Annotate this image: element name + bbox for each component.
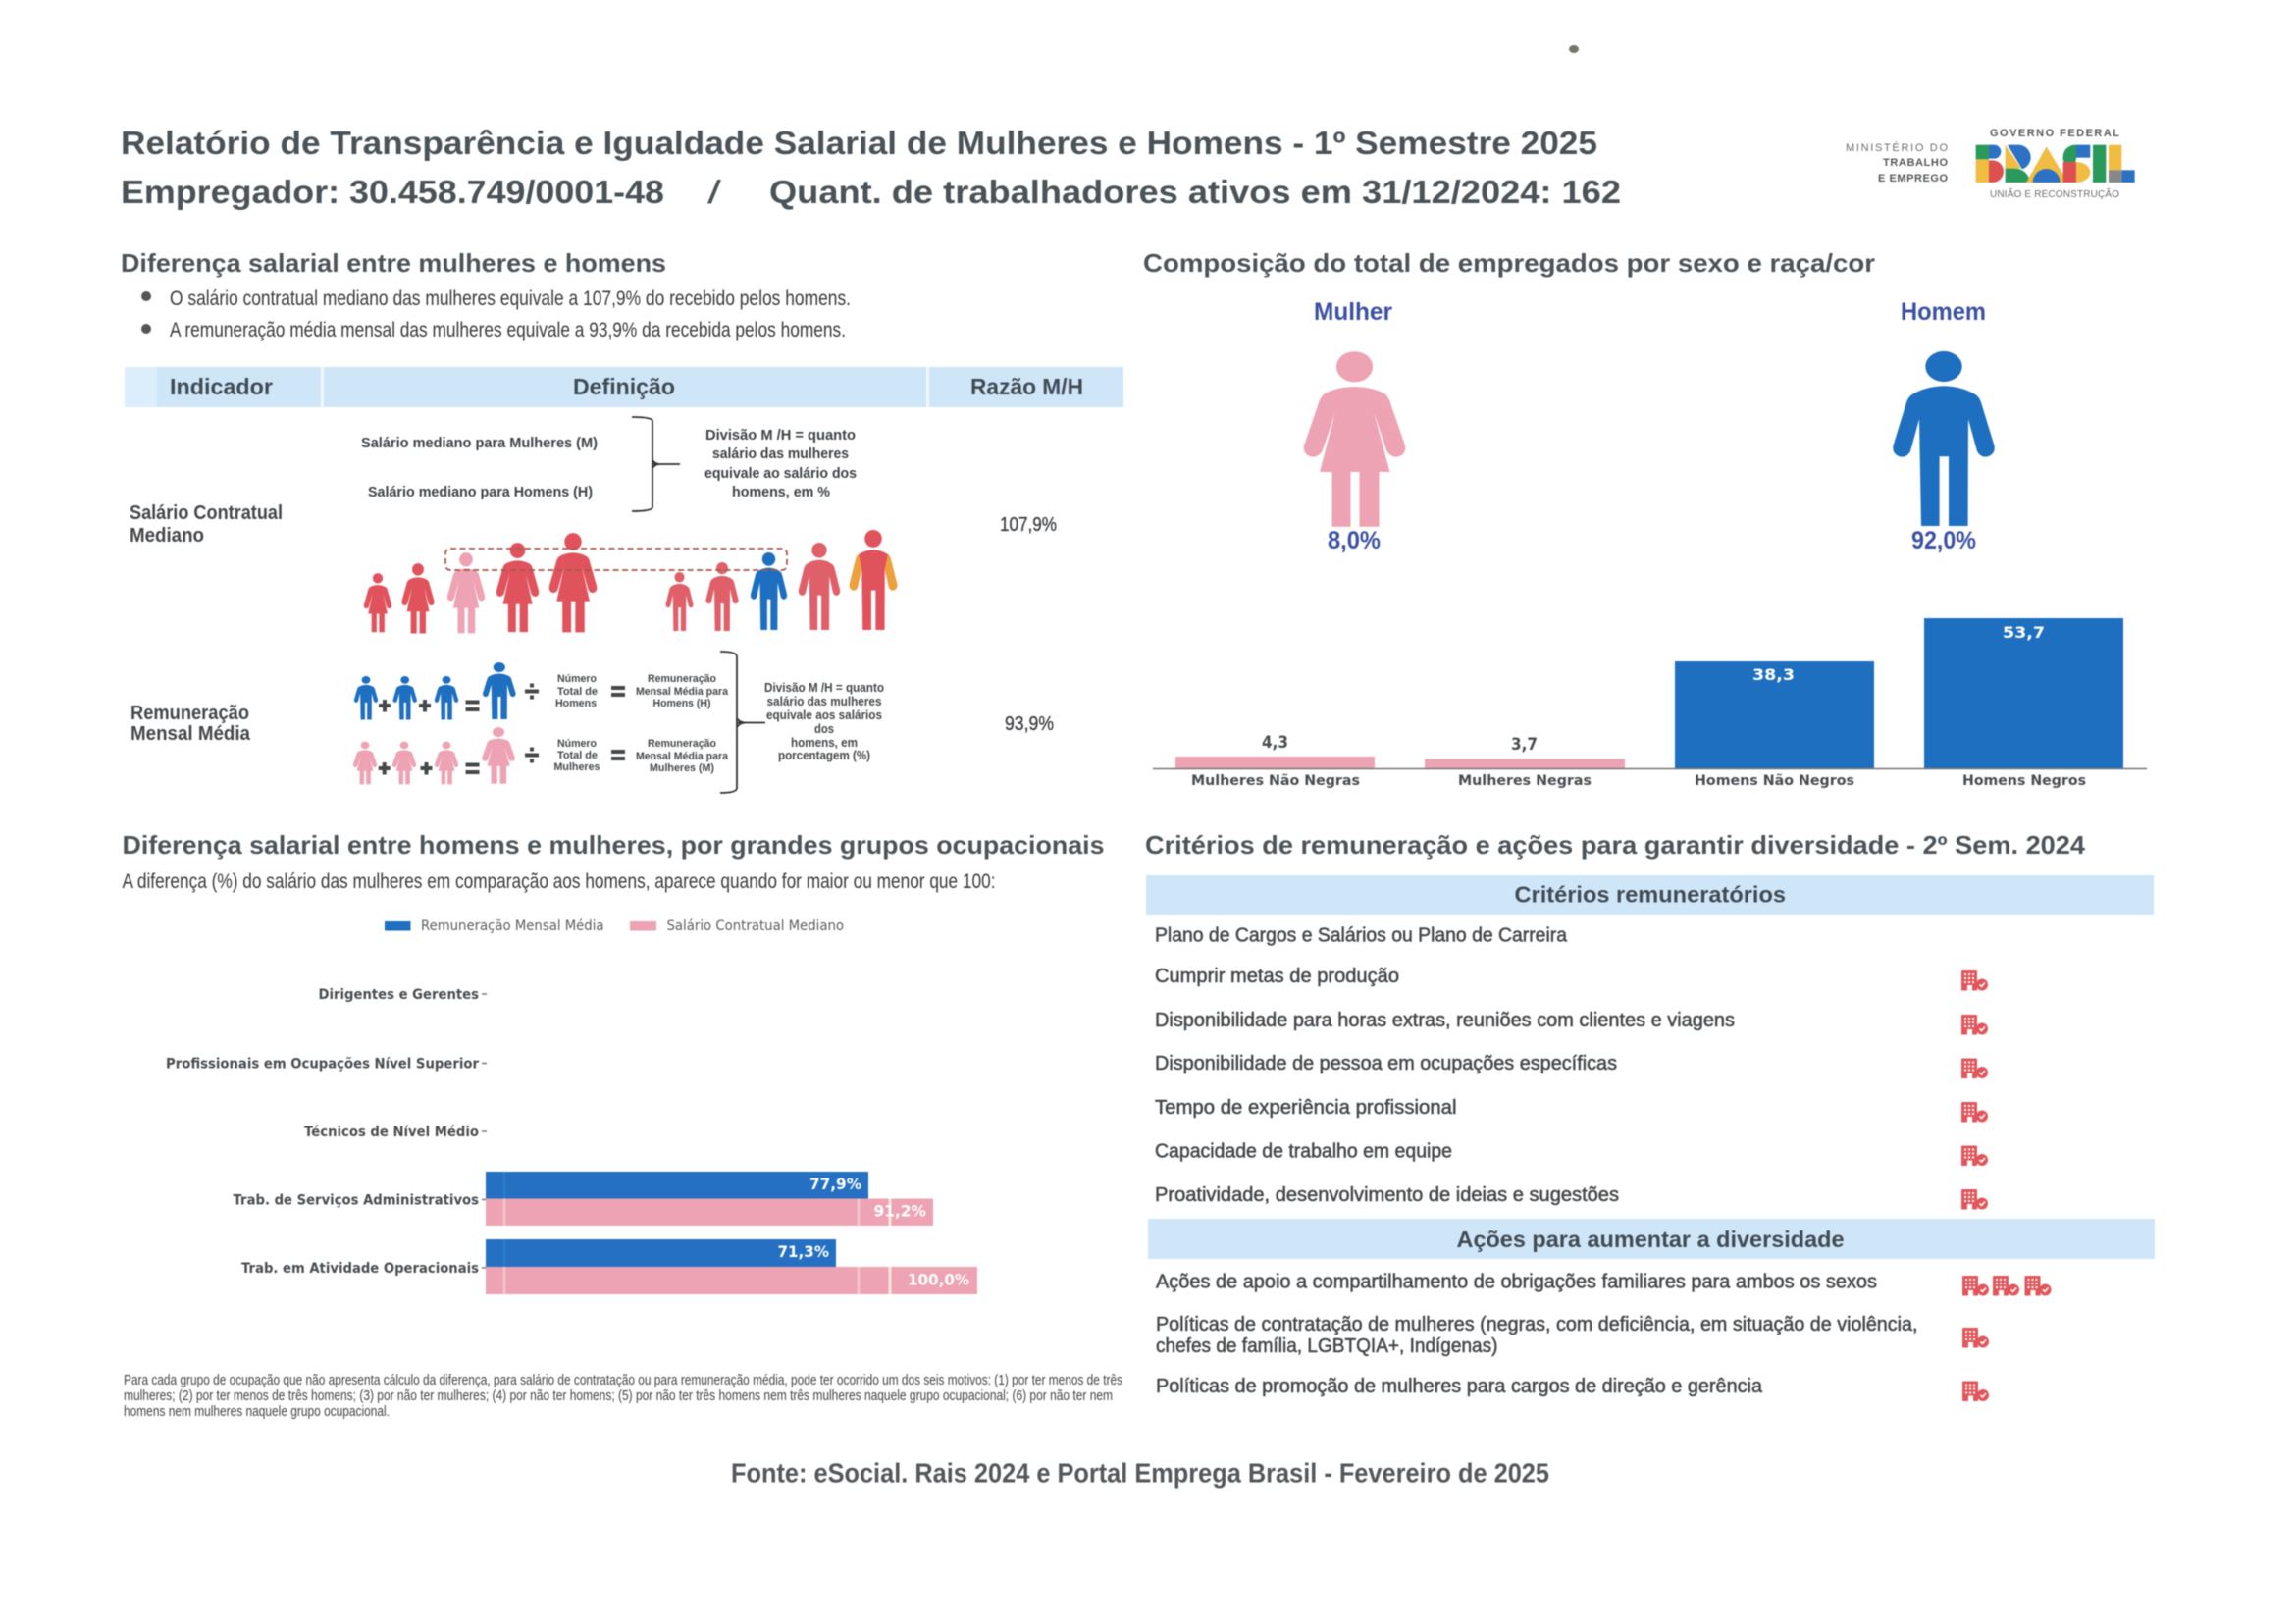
formula: homens: Remuneração bbox=[648, 673, 716, 685]
bullet list bbox=[141, 288, 851, 341]
title bbox=[121, 125, 1621, 210]
scan speck bbox=[1569, 45, 1579, 53]
list: critérios: Proatividade, desenvolvimento de ideias e sugestões bbox=[1155, 1184, 1619, 1206]
footnote: homens nem mulheres naquele grupo ocupacional. bbox=[124, 1403, 390, 1420]
formula: homens: Homens (H) bbox=[653, 698, 711, 709]
row label: salário contratual mediano bbox=[130, 502, 283, 547]
definition: salário mediano com chave: equivale ao salário dos bbox=[704, 465, 857, 482]
list: critérios: Plano de Cargos e Salários ou Plano de Carreira bbox=[1155, 924, 1568, 946]
row label: remuneração mensal média bbox=[130, 703, 251, 745]
formula: homens: Total de bbox=[557, 686, 598, 698]
list: ações: Políticas de promoção de mulheres para cargos de direção e gerência bbox=[1156, 1376, 1763, 1397]
subtitle: A diferença (%) do salário das mulheres em comparação aos homens, aparece quando for maior ou menor que 100: bbox=[122, 870, 995, 893]
band: ações: Ações para aumentar a diversidade bbox=[1456, 1227, 1845, 1252]
formula: mulheres bbox=[353, 727, 729, 784]
definition: salário mediano com chave: Salário mediano para Mulheres (M) bbox=[361, 435, 598, 451]
panel: grupos ocupacionais bbox=[122, 830, 1122, 1420]
formula: mulheres: Mulheres (M) bbox=[650, 762, 714, 774]
bar chart: grupos ocupacionais: Técnicos de Nível Médio bbox=[304, 1125, 479, 1140]
bar chart: grupos ocupacionais: 77,9% bbox=[809, 1175, 861, 1193]
icons: ações bbox=[1962, 1276, 2051, 1401]
figure: homem 92,0%: 92,0% bbox=[1911, 527, 1976, 554]
bullet list: A remuneração média mensal das mulheres equivale a 93,9% da recebida pelos homens. bbox=[170, 319, 846, 341]
heading: grupos ocupacionais: Diferença salarial entre homens e mulheres, por grandes grupos ocupacionais bbox=[122, 830, 1105, 860]
row label: remuneração mensal média: Remuneração bbox=[130, 703, 249, 724]
logo: Ministério do Trabalho e Governo Federal: UNIÃO E RECONSTRUÇÃO bbox=[1990, 187, 2120, 200]
list: ações: chefes de família, LGBTQIA+, Indígenas) bbox=[1156, 1335, 1497, 1357]
formula: homens bbox=[354, 662, 729, 720]
bar chart: grupos ocupacionais: 71,3% bbox=[777, 1242, 829, 1261]
figure: mulher 8,0%: Mulher bbox=[1314, 298, 1392, 326]
list: ações bbox=[1156, 1272, 1917, 1397]
bar chart: grupos ocupacionais: Dirigentes e Gerentes bbox=[318, 987, 479, 1003]
bar chart: sexo e raça: Homens Negros bbox=[1962, 773, 2086, 789]
bar chart: sexo e raça: Mulheres Negras bbox=[1458, 773, 1592, 789]
bracket and definition: remuneração: salário das mulheres bbox=[767, 695, 882, 708]
list: critérios: Cumprir metas de produção bbox=[1155, 966, 1399, 987]
bar chart: grupos ocupacionais: Trab. de Serviços Administrativos bbox=[234, 1193, 479, 1209]
bar chart: grupos ocupacionais: 91,2% bbox=[873, 1201, 926, 1221]
footnote: mulheres; (2) por ter menos de três homens; (3) por não ter mulheres; (4) por não ter homens; (5) por não ter três homens nem três mulheres naquele grupo ocupacional; (6) por não ter nem bbox=[124, 1387, 1113, 1404]
bracket and definition: remuneração: porcentagem (%) bbox=[778, 749, 870, 762]
bar chart: sexo e raça: 3,7 bbox=[1511, 735, 1538, 755]
logo: Ministério do Trabalho e Governo Federal: TRABALHO bbox=[1883, 157, 1949, 169]
value: 107,9%: 107,9% bbox=[1000, 514, 1057, 536]
bracket and definition: remuneração: equivale aos salários bbox=[766, 708, 882, 722]
figure: homem 92,0% bbox=[1893, 298, 1995, 554]
definition: salário mediano com chave: homens, em % bbox=[732, 484, 830, 500]
bracket and definition: remuneração: Divisão M /H = quanto bbox=[764, 681, 884, 695]
legend bbox=[385, 918, 844, 934]
formula: homens: Mensal Média para bbox=[636, 686, 729, 698]
icon row: homens bbox=[666, 530, 897, 631]
icons: critérios bbox=[1961, 970, 1988, 1209]
title: Relatório de Transparência e Igualdade Salarial de Mulheres e Homens - 1º Semestre 2025 bbox=[121, 125, 1597, 161]
footnote bbox=[124, 1372, 1122, 1420]
bar chart: grupos ocupacionais bbox=[166, 987, 977, 1294]
band: critérios remuneratórios: Critérios remuneratórios bbox=[1515, 881, 1786, 907]
title: Quant. de trabalhadores ativos em 31/12/2024: 162 bbox=[769, 174, 1621, 210]
figure: homem 92,0%: Homem bbox=[1901, 298, 1986, 326]
bar chart: sexo e raça bbox=[1153, 618, 2147, 789]
panel: diferença salarial bbox=[121, 248, 1123, 793]
value: 93,9%: 93,9% bbox=[1005, 713, 1054, 735]
dashed median box bbox=[445, 549, 787, 570]
bar chart: sexo e raça: 38,3 bbox=[1752, 665, 1795, 684]
table header: Indicador bbox=[170, 374, 273, 399]
formula: mulheres: Mulheres bbox=[553, 761, 600, 773]
logo: Ministério do Trabalho e Governo Federal: MINISTÉRIO DO bbox=[1846, 141, 1949, 154]
definition: salário mediano com chave: Divisão M /H = quanto bbox=[705, 427, 856, 444]
formula: homens: Número bbox=[557, 673, 597, 685]
row label: remuneração mensal média: Mensal Média bbox=[130, 723, 251, 745]
definition: salário mediano com chave bbox=[361, 417, 857, 511]
formula: mulheres: Mensal Média para bbox=[636, 751, 729, 762]
title: Empregador: 30.458.749/0001-48 bbox=[121, 174, 664, 210]
heading: diferença salarial: Diferença salarial entre mulheres e homens bbox=[121, 248, 666, 278]
list: critérios: Disponibilidade de pessoa em ocupações específicas bbox=[1155, 1053, 1617, 1074]
bar chart: grupos ocupacionais: Profissionais em Ocupações Nível Superior bbox=[166, 1056, 479, 1072]
figure: mulher 8,0%: 8,0% bbox=[1328, 527, 1381, 554]
bar chart: sexo e raça: 4,3 bbox=[1262, 733, 1288, 753]
formula: mulheres: Total de bbox=[557, 750, 598, 761]
row label: salário contratual mediano: Mediano bbox=[130, 525, 204, 547]
list: critérios: Disponibilidade para horas extras, reuniões com clientes e viagens bbox=[1155, 1010, 1735, 1031]
list: critérios: Tempo de experiência profissional bbox=[1155, 1097, 1456, 1119]
logo: Ministério do Trabalho e Governo Federal bbox=[1846, 128, 2135, 200]
heading: critérios: Critérios de remuneração e ações para garantir diversidade - 2º Sem. 2024 bbox=[1145, 830, 2086, 860]
list: critérios bbox=[1155, 924, 1735, 1206]
bar chart: grupos ocupacionais: Trab. em Atividade Operacionais bbox=[241, 1261, 479, 1277]
bar chart: grupos ocupacionais: 100,0% bbox=[908, 1270, 969, 1289]
bracket and definition: remuneração: homens, em bbox=[791, 736, 858, 750]
icon row: mulheres bbox=[364, 533, 597, 633]
row label: salário contratual mediano: Salário Contratual bbox=[130, 502, 283, 524]
bullet list: O salário contratual mediano das mulheres equivale a 107,9% do recebido pelos homens. bbox=[170, 288, 851, 310]
heading: composição: Composição do total de empregados por sexo e raça/cor bbox=[1143, 248, 1875, 278]
table header: Razão M/H bbox=[970, 374, 1083, 399]
band: critérios remuneratórios bbox=[1146, 875, 2154, 915]
legend: Remuneração Mensal Média bbox=[421, 918, 604, 934]
panel: composição bbox=[1143, 248, 2147, 789]
definition: salário mediano com chave: salário das mulheres bbox=[712, 445, 849, 462]
bar chart: sexo e raça: Mulheres Não Negras bbox=[1191, 773, 1360, 789]
bracket and definition: remuneração: dos bbox=[814, 722, 834, 736]
logo: Ministério do Trabalho e Governo Federal: E EMPREGO bbox=[1878, 173, 1949, 184]
logo: Ministério do Trabalho e Governo Federal: GOVERNO FEDERAL bbox=[1990, 128, 2120, 139]
legend: Salário Contratual Mediano bbox=[667, 918, 844, 934]
bar chart: sexo e raça: Homens Não Negros bbox=[1695, 773, 1854, 789]
footnote: Para cada grupo de ocupação que não apresenta cálculo da diferença, para salário de contratação ou para remuneração média, pode ter ocorrido um dos seis motivos: (1) por ter menos de três bbox=[124, 1372, 1122, 1388]
panel: critérios e ações bbox=[1145, 830, 2155, 1401]
band: ações bbox=[1148, 1219, 2155, 1259]
source line: Fonte: eSocial. Rais 2024 e Portal Emprega Brasil - Fevereiro de 2025 bbox=[731, 1458, 1549, 1488]
bracket and definition: remuneração bbox=[720, 652, 884, 793]
formula: mulheres: Remuneração bbox=[648, 738, 716, 750]
bar chart: sexo e raça: 53,7 bbox=[2003, 623, 2045, 642]
table header bbox=[125, 367, 1123, 407]
formula: homens: Homens bbox=[555, 698, 597, 709]
definition: salário mediano com chave: Salário mediano para Homens (H) bbox=[368, 484, 593, 500]
list: critérios: Capacidade de trabalho em equipe bbox=[1155, 1140, 1452, 1162]
table header: Definição bbox=[573, 374, 675, 399]
formula: mulheres: Número bbox=[557, 738, 597, 750]
list: ações: Ações de apoio a compartilhamento de obrigações familiares para ambos os sexos bbox=[1156, 1272, 1877, 1293]
figure: mulher 8,0% bbox=[1304, 298, 1405, 554]
title: / bbox=[707, 174, 722, 210]
list: ações: Políticas de contratação de mulheres (negras, com deficiência, em situação de violência, bbox=[1156, 1314, 1917, 1335]
